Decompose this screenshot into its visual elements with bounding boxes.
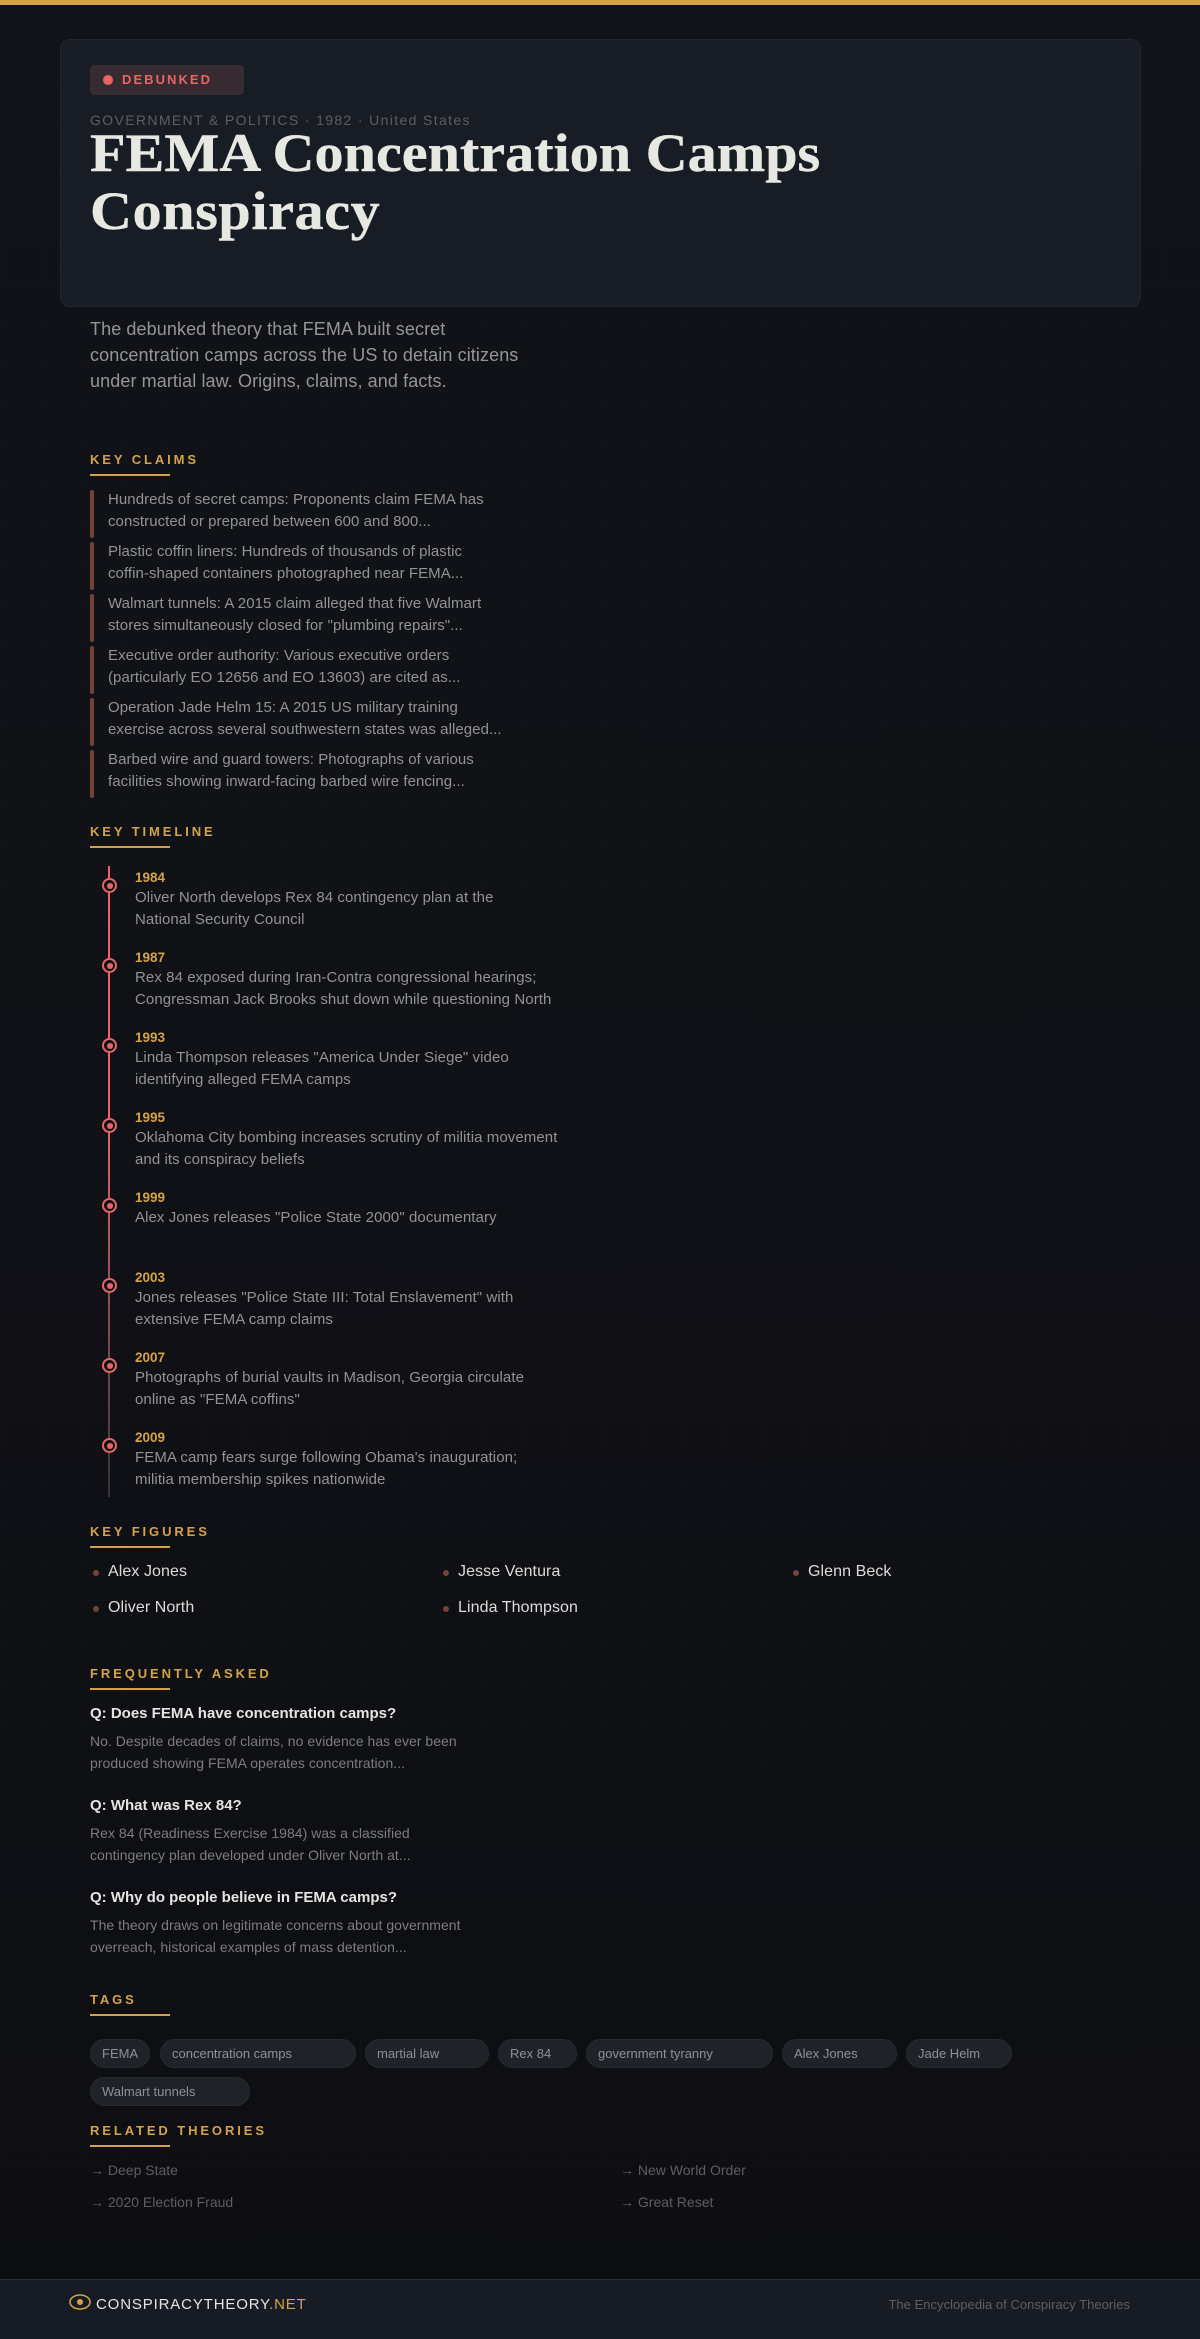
intro description: under martial law. Origins, claims, and facts. [90, 371, 447, 391]
related link: → Great Reset [620, 2194, 713, 2210]
timeline event 1984: Oliver North develops Rex 84 contingency plan at the [135, 889, 494, 906]
faq 1: produced showing FEMA operates concentration... [90, 1755, 405, 1771]
faq 2: contingency plan developed under Oliver North at... [90, 1847, 411, 1863]
intro description: The debunked theory that FEMA built secret [90, 319, 445, 339]
text: 2009 [135, 1430, 165, 1445]
text: 1995 [135, 1110, 165, 1125]
claim 5: exercise across several southwestern states was alleged... [108, 721, 502, 738]
category meta line: GOVERNMENT & POLITICS · 1982 · United States [90, 112, 471, 128]
related link: → New World Order [620, 2162, 746, 2178]
claim 6 [90, 750, 474, 798]
timeline event 1995: Oklahoma City bombing increases scrutiny of militia movement [135, 1129, 557, 1146]
faq 3: overreach, historical examples of mass detention... [90, 1939, 407, 1955]
timeline event 2003: extensive FEMA camp claims [135, 1311, 333, 1328]
icon: eye logo [69, 2294, 91, 2310]
faq 1: Q: Does FEMA have concentration camps? [90, 1705, 396, 1722]
timeline event 1987: Rex 84 exposed during Iran-Contra congressional hearings; [135, 969, 536, 986]
heading: key figures: KEY FIGURES [90, 1524, 210, 1539]
intro description: concentration camps across the US to detain citizens [90, 345, 518, 365]
footer [0, 2279, 1200, 2339]
text: 1984 [135, 870, 165, 885]
title: Conspiracy [90, 181, 380, 241]
claim 5 [90, 698, 502, 746]
text: 1987 [135, 950, 165, 965]
tag [906, 2039, 1012, 2068]
badge: debunked [90, 65, 244, 95]
timeline event 2007 [102, 1350, 524, 1408]
top accent bar [0, 0, 1200, 5]
tag [90, 2039, 150, 2068]
heading: frequently asked: FREQUENTLY ASKED [90, 1666, 272, 1681]
related link: → Deep State [90, 2162, 178, 2178]
faq 3: Q: Why do people believe in FEMA camps? [90, 1889, 397, 1906]
claim 6: Barbed wire and guard towers: Photographs of various [108, 751, 474, 768]
tag: Rex 84 [510, 2046, 551, 2061]
claim 6: facilities showing inward-facing barbed wire fencing... [108, 773, 465, 790]
figure: Glenn Beck: Glenn Beck [808, 1563, 892, 1580]
figure: Oliver North: Oliver North [108, 1599, 194, 1616]
timeline event 1987 [102, 950, 551, 1008]
claim 4: Executive order authority: Various executive orders [108, 647, 449, 664]
timeline axis [108, 866, 110, 1497]
timeline event 2009: FEMA camp fears surge following Obama's inauguration; [135, 1449, 517, 1466]
faq 1: No. Despite decades of claims, no evidence has ever been [90, 1733, 457, 1749]
faq 3 [90, 1889, 461, 1955]
timeline event 1984: National Security Council [135, 911, 305, 928]
footer tagline: The Encyclopedia of Conspiracy Theories [888, 2297, 1130, 2312]
claim 5: Operation Jade Helm 15: A 2015 US military training [108, 699, 458, 716]
tag: Alex Jones [794, 2046, 858, 2061]
claim 3: Walmart tunnels: A 2015 claim alleged that five Walmart [108, 595, 481, 612]
heading: key timeline: KEY TIMELINE [90, 824, 216, 839]
timeline event 2009: militia membership spikes nationwide [135, 1471, 385, 1488]
tag [498, 2039, 577, 2068]
tag [90, 2077, 250, 2106]
tag [586, 2039, 773, 2068]
claim 1: Hundreds of secret camps: Proponents claim FEMA has [108, 491, 484, 508]
tag: government tyranny [598, 2046, 713, 2061]
faq 2: Q: What was Rex 84? [90, 1797, 242, 1814]
timeline event 2007: online as "FEMA coffins" [135, 1391, 300, 1408]
claim 1: constructed or prepared between 600 and 800... [108, 513, 431, 530]
panel: hero card [60, 39, 1141, 307]
timeline event 1993 [102, 1030, 509, 1088]
tag: concentration camps [172, 2046, 292, 2061]
timeline event 1987: Congressman Jack Brooks shut down while questioning North [135, 991, 551, 1008]
timeline event 1999: Alex Jones releases "Police State 2000" documentary [135, 1209, 497, 1226]
badge label: DEBUNKED [122, 72, 212, 87]
timeline event 1995: and its conspiracy beliefs [135, 1151, 305, 1168]
text: 2003 [135, 1270, 165, 1285]
faq 2: Rex 84 (Readiness Exercise 1984) was a classified [90, 1825, 410, 1841]
tag: FEMA [102, 2046, 138, 2061]
timeline event 1995 [102, 1110, 558, 1168]
timeline event 2003: Jones releases "Police State III: Total Enslavement" with [135, 1289, 513, 1306]
heading: tags: TAGS [90, 1992, 137, 2007]
tag: Jade Helm [918, 2046, 980, 2061]
tag [782, 2039, 897, 2068]
text: 1999 [135, 1190, 165, 1205]
timeline event 2003 [102, 1270, 513, 1328]
title [90, 123, 820, 241]
claim 3: stores simultaneously closed for "plumbing repairs"... [108, 617, 463, 634]
claim 2 [90, 542, 463, 590]
faq 3: The theory draws on legitimate concerns about government [90, 1917, 461, 1933]
timeline event 1993: Linda Thompson releases "America Under Siege" video [135, 1049, 509, 1066]
faq 1 [90, 1705, 457, 1771]
claim 1 [90, 490, 484, 538]
timeline event 2007: Photographs of burial vaults in Madison, Georgia circulate [135, 1369, 524, 1386]
timeline event 1984 [102, 870, 494, 928]
intro description [90, 319, 518, 391]
claim 4: (particularly EO 12656 and EO 13603) are cited as... [108, 669, 460, 686]
icon: status dot [103, 75, 113, 85]
claim 4 [90, 646, 460, 694]
title: FEMA Concentration Camps [90, 123, 820, 183]
faq 2 [90, 1797, 411, 1863]
heading: key claims: KEY CLAIMS [90, 452, 199, 467]
claim 3 [90, 594, 482, 642]
tag: Walmart tunnels [102, 2084, 195, 2099]
timeline event 1999 [102, 1190, 497, 1226]
logo wordmark: CONSPIRACYTHEORY.NET [96, 2296, 307, 2313]
tag [365, 2039, 489, 2068]
heading: related theories: RELATED THEORIES [90, 2123, 267, 2138]
figure: Alex Jones: Alex Jones [108, 1563, 187, 1580]
claim 2: coffin-shaped containers photographed near FEMA... [108, 565, 463, 582]
related link: → 2020 Election Fraud [90, 2194, 233, 2210]
timeline event 2009 [102, 1430, 517, 1488]
timeline event 1993: identifying alleged FEMA camps [135, 1071, 351, 1088]
tag [160, 2039, 356, 2068]
figure: Linda Thompson: Linda Thompson [458, 1599, 578, 1616]
figure: Jesse Ventura: Jesse Ventura [458, 1563, 560, 1580]
text: 1993 [135, 1030, 165, 1045]
tag: martial law [377, 2046, 439, 2061]
text: 2007 [135, 1350, 165, 1365]
claim 2: Plastic coffin liners: Hundreds of thousands of plastic [108, 543, 462, 560]
